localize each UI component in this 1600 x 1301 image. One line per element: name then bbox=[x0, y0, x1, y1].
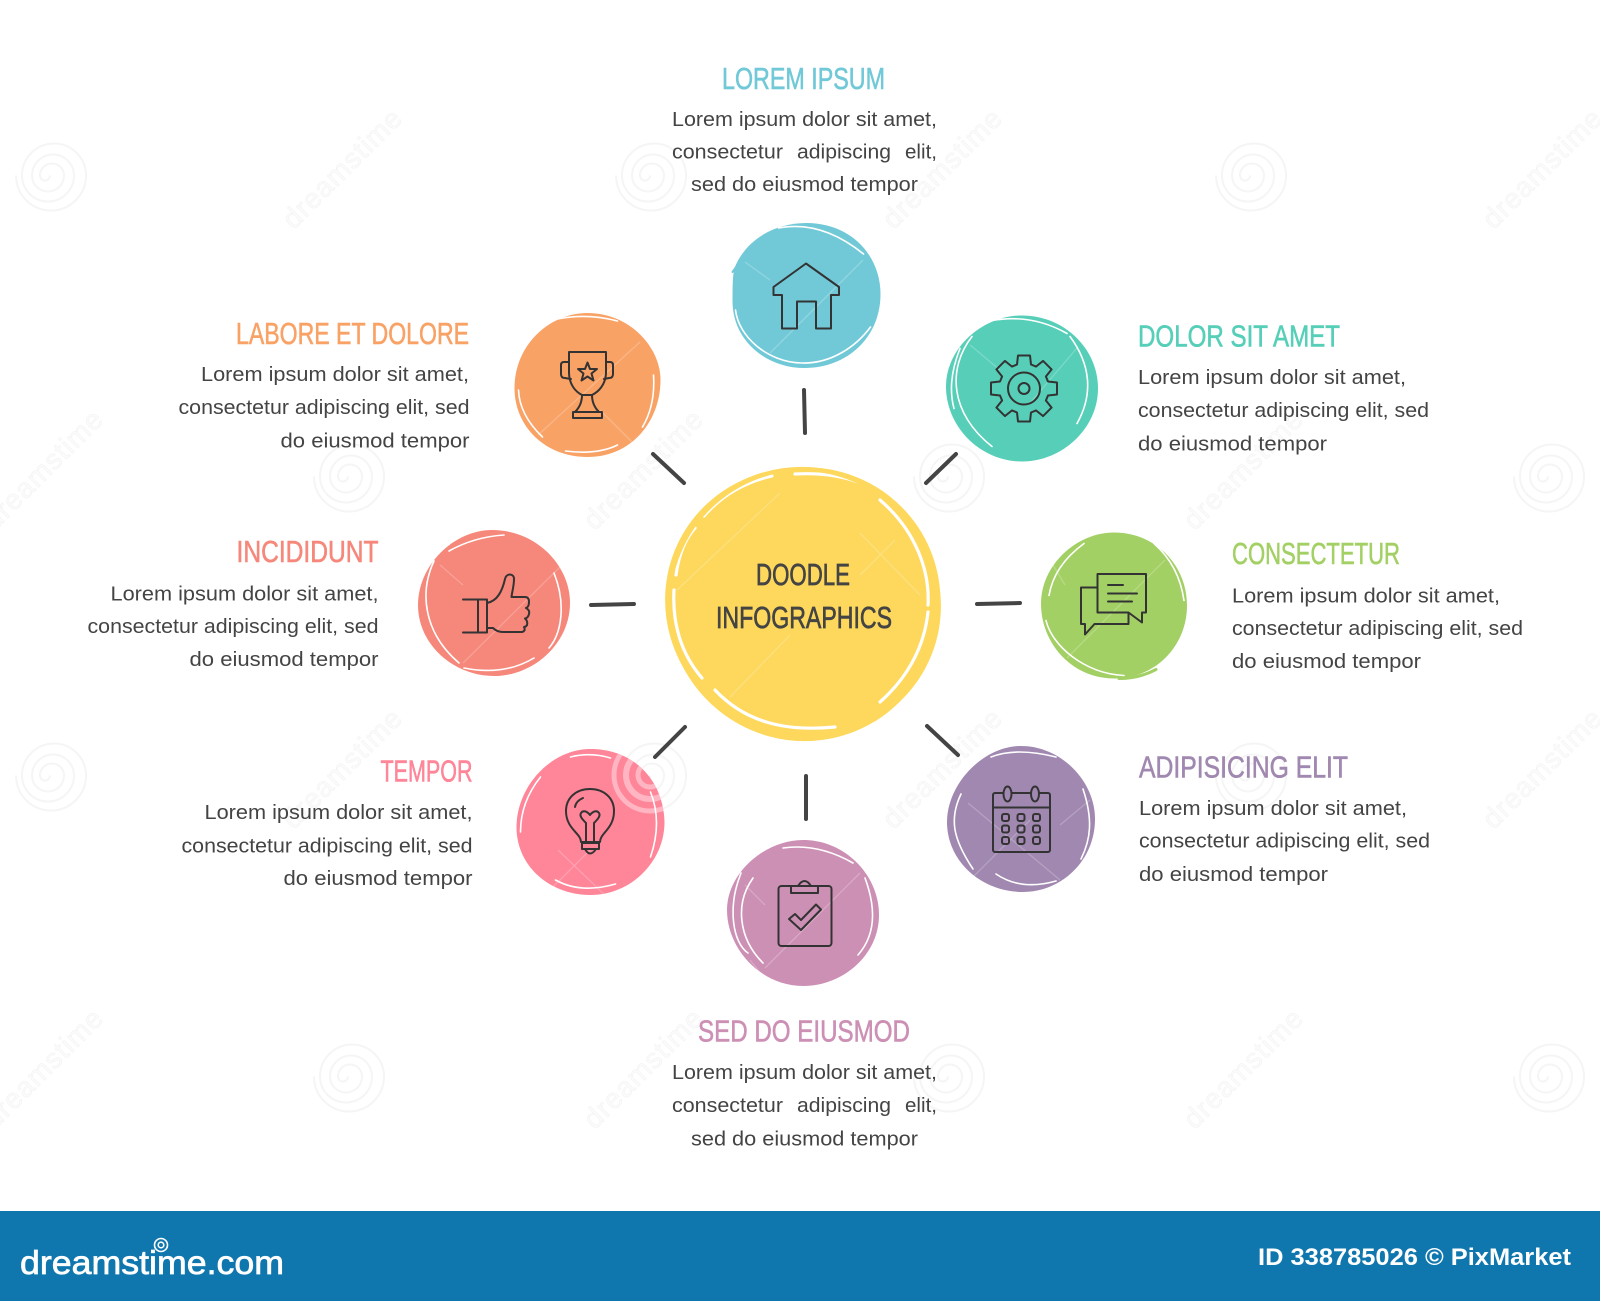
body text: Lorem ipsum dolor sit amet, bbox=[204, 801, 472, 824]
heading: SED DO EIUSMOD bbox=[698, 1014, 910, 1048]
body text: consectetur bbox=[672, 1094, 783, 1117]
body text bbox=[88, 582, 379, 671]
body text bbox=[1139, 797, 1430, 886]
body text: adipiscing bbox=[797, 1094, 891, 1117]
body text bbox=[1232, 584, 1523, 673]
body text: Lorem ipsum dolor sit amet, bbox=[110, 582, 378, 606]
teal circle with gear icon bbox=[946, 316, 1098, 462]
body text: do eiusmod tempor bbox=[284, 867, 473, 890]
body text: sed do eiusmod tempor bbox=[691, 1128, 918, 1150]
body text: elit, bbox=[905, 140, 937, 164]
footer band bbox=[0, 1211, 1600, 1301]
icon: trophy bbox=[561, 352, 613, 418]
body text: do eiusmod tempor bbox=[1232, 650, 1421, 673]
icon: chat bubbles bbox=[1081, 574, 1146, 634]
text: dreamstime bbox=[276, 102, 408, 234]
center title: DOODLE bbox=[756, 557, 850, 592]
body text bbox=[182, 801, 473, 890]
body text: elit, bbox=[905, 1094, 937, 1117]
panel: dolor sit amet bbox=[946, 316, 1429, 462]
body text: do eiusmod tempor bbox=[1139, 863, 1328, 886]
heading: INCIDIDUNT bbox=[236, 534, 379, 569]
plum circle with clipboard icon bbox=[727, 840, 879, 986]
heading: TEMPOR bbox=[380, 754, 472, 788]
center title: INFOGRAPHICS bbox=[716, 600, 892, 635]
body text: consectetur adipiscing elit, sed bbox=[88, 615, 378, 638]
text: dreamstime bbox=[1177, 403, 1309, 535]
body text: Lorem ipsum dolor sit amet, bbox=[1139, 797, 1407, 820]
body text bbox=[672, 108, 937, 196]
body text: do eiusmod tempor bbox=[280, 430, 470, 452]
orange circle with trophy icon bbox=[514, 313, 660, 457]
center title bbox=[716, 557, 892, 635]
body text: do eiusmod tempor bbox=[1138, 432, 1327, 456]
heading: ADIPISICING ELIT bbox=[1139, 750, 1348, 784]
panel: tempor bbox=[182, 749, 664, 895]
body text: adipiscing bbox=[797, 140, 891, 164]
body text: Lorem ipsum dolor sit amet, bbox=[672, 1061, 937, 1084]
text: dreamstime bbox=[876, 102, 1008, 234]
heading: LABORE ET DOLORE bbox=[236, 316, 469, 351]
panel: lorem ipsum (top) bbox=[672, 61, 937, 368]
body text: consectetur adipiscing elit, sed bbox=[178, 396, 470, 419]
heading: CONSECTETUR bbox=[1232, 536, 1400, 571]
body text: Lorem ipsum dolor sit amet, bbox=[672, 108, 937, 131]
panel: central doodle circle bbox=[619, 419, 987, 789]
body text: sed do eiusmod tempor bbox=[691, 173, 918, 196]
body text: Lorem ipsum dolor sit amet, bbox=[201, 363, 469, 386]
connector lines bbox=[591, 390, 1020, 819]
purple circle with calendar icon bbox=[947, 746, 1095, 892]
body text: do eiusmod tempor bbox=[190, 648, 379, 671]
blue circle with home icon bbox=[732, 223, 880, 368]
text: dreamstime bbox=[276, 702, 408, 834]
pink circle with light bulb icon bbox=[516, 749, 664, 895]
text: dreamstime bbox=[577, 1002, 709, 1134]
text: dreamstime bbox=[876, 702, 1008, 834]
logo: dreamstime.com: dreamstime.com bbox=[20, 1244, 284, 1281]
body text: Lorem ipsum dolor sit amet, bbox=[1138, 366, 1406, 389]
icon: gear bbox=[991, 356, 1057, 422]
yellow scribble blob bbox=[619, 419, 987, 789]
body text: consectetur adipiscing elit, sed bbox=[1139, 830, 1430, 852]
icon: clipboard check bbox=[778, 881, 832, 946]
icon: light bulb bbox=[566, 789, 614, 854]
body text: consectetur bbox=[672, 140, 783, 164]
body text: Lorem ipsum dolor sit amet, bbox=[1232, 584, 1500, 608]
body text: consectetur adipiscing elit, sed bbox=[1138, 399, 1429, 422]
icon: home bbox=[774, 264, 839, 328]
body text: consectetur adipiscing elit, sed bbox=[1232, 617, 1523, 640]
heading: LOREM IPSUM bbox=[722, 61, 885, 96]
body text bbox=[672, 1061, 937, 1150]
panel: incididunt bbox=[88, 530, 570, 676]
body text: consectetur adipiscing elit, sed bbox=[182, 834, 472, 858]
panel: adipisicing elit bbox=[947, 746, 1430, 892]
panel: consectetur bbox=[1041, 532, 1523, 678]
text: dreamstime bbox=[1177, 1002, 1309, 1134]
panel: sed do eiusmod (bottom) bbox=[672, 840, 937, 1150]
green circle with chat icon bbox=[1041, 532, 1187, 678]
heading: DOLOR SIT AMET bbox=[1138, 318, 1340, 354]
body text bbox=[1138, 366, 1429, 456]
coral circle with thumbs-up icon bbox=[418, 530, 570, 676]
panel: labore et dolore bbox=[178, 313, 660, 457]
text: dreamstime bbox=[577, 403, 709, 535]
icon: thumbs up bbox=[463, 574, 529, 632]
image id credit: ID 338785026 © PixMarket bbox=[1258, 1244, 1571, 1271]
body text bbox=[178, 363, 470, 452]
icon: calendar bbox=[993, 786, 1050, 852]
